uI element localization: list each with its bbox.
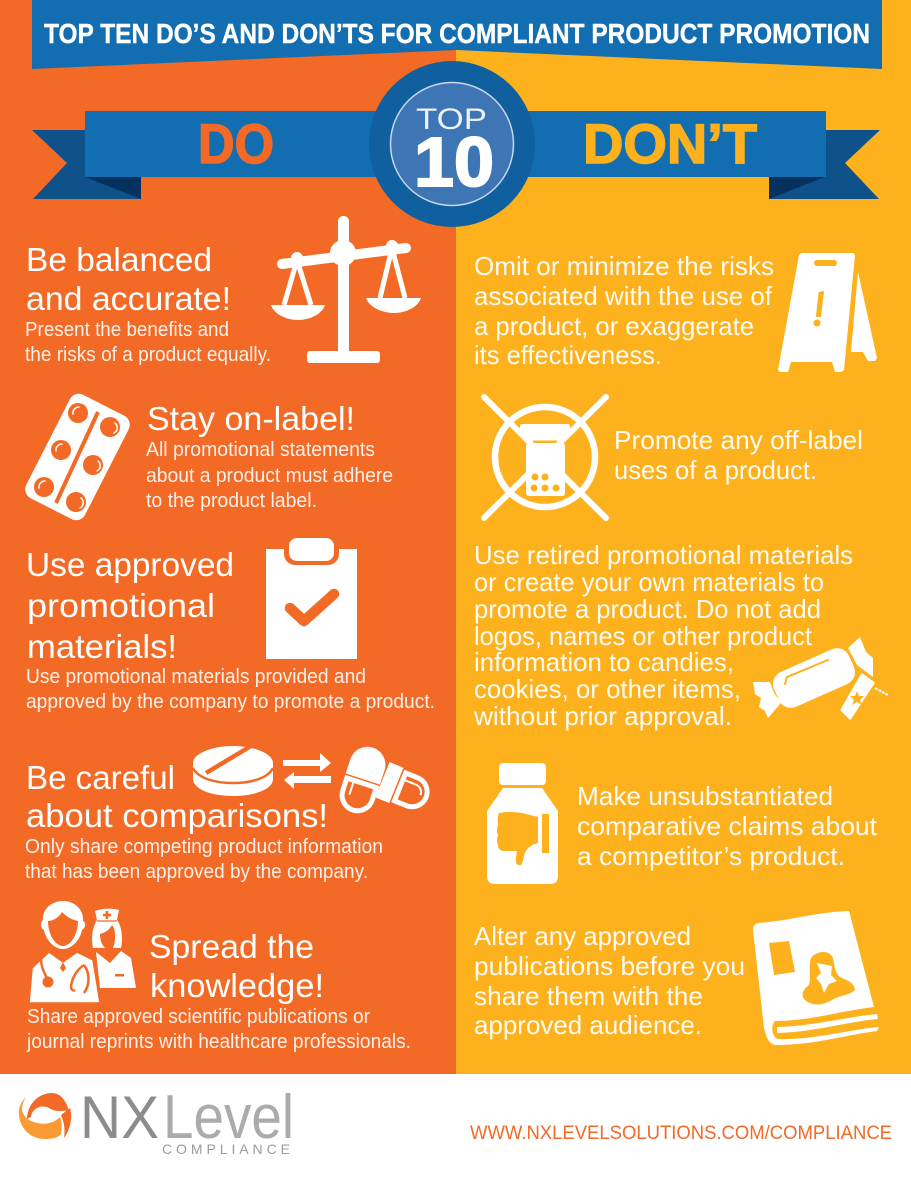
ribbon	[32, 111, 880, 199]
icon: blister pack	[22, 390, 133, 524]
item: omit risks	[474, 251, 877, 372]
heading	[26, 546, 234, 665]
footer background	[0, 1074, 911, 1186]
icon: crossed-out bottle	[484, 397, 606, 518]
heading: Be careful	[26, 759, 175, 796]
description	[25, 836, 383, 883]
description	[26, 666, 435, 713]
description: Use promotional materials provided and	[26, 666, 366, 688]
text: Alter any approved	[474, 921, 691, 951]
description: about a product must adhere	[146, 465, 393, 487]
heading	[26, 241, 231, 317]
heading: materials!	[27, 628, 177, 665]
item: use approved materials	[26, 535, 435, 713]
nurse	[96, 951, 136, 988]
description: to the product label.	[146, 490, 317, 512]
heading: knowledge!	[150, 967, 324, 1004]
text: uses of a product.	[614, 455, 817, 485]
panel: don't background	[456, 0, 911, 1074]
item: unsubstantiated claims	[487, 763, 878, 884]
ribbon band	[85, 111, 826, 177]
heading	[26, 759, 328, 834]
heading: and accurate!	[26, 280, 231, 317]
ribbon tail left	[32, 130, 141, 199]
icon: bottle with thumbs down	[487, 763, 558, 884]
logo wordmark Level: Level	[163, 1083, 294, 1152]
description: the risks of a product equally.	[25, 344, 271, 366]
item: spread the knowledge	[26, 901, 411, 1053]
text: promote a product. Do not add	[474, 594, 821, 624]
text	[473, 540, 853, 731]
item: off-label	[484, 397, 863, 518]
text: its effectiveness.	[474, 340, 662, 370]
description	[25, 319, 271, 366]
icon: swap arrows	[283, 753, 331, 789]
icon: scales	[271, 216, 421, 363]
ribbon tail right	[769, 130, 880, 199]
badge label top: TOP	[416, 103, 487, 136]
logo tagline: COMPLIANCE	[162, 1141, 290, 1157]
description: Only share competing product information	[25, 836, 383, 858]
text: a product, or exaggerate	[474, 311, 754, 341]
ribbon fold left	[85, 177, 141, 199]
logo wordmark NX: NX	[80, 1084, 159, 1151]
heading: about comparisons!	[26, 797, 328, 834]
text	[614, 425, 863, 485]
icon: journal	[753, 911, 879, 1045]
text: publications before you	[474, 951, 745, 981]
description	[146, 439, 393, 512]
text	[474, 921, 745, 1040]
item: retired materials	[473, 540, 888, 731]
text: comparative claims about	[577, 811, 878, 841]
top 10 badge	[369, 61, 535, 227]
text: logos, names or other product	[474, 621, 813, 651]
icon: candy	[753, 637, 888, 718]
text: cookies, or other items,	[474, 674, 741, 704]
heading: Stay on-label!	[147, 400, 355, 437]
text: Make unsubstantiated	[577, 781, 833, 811]
footer url: WWW.NXLEVELSOLUTIONS.COM/COMPLIANCE	[470, 1122, 892, 1144]
description: All promotional statements	[146, 439, 375, 461]
description: journal reprints with healthcare professionals.	[26, 1031, 411, 1053]
doctor	[41, 901, 85, 949]
footer logo	[19, 1083, 294, 1157]
heading	[149, 928, 324, 1004]
description: Present the benefits and	[25, 319, 229, 341]
text: without prior approval.	[473, 701, 732, 731]
title banner	[32, 0, 882, 69]
ribbon fold right	[769, 177, 825, 199]
heading: Be balanced	[26, 241, 212, 278]
item: be balanced	[25, 216, 421, 366]
icon: clipboard	[266, 535, 357, 659]
text: share them with the	[474, 981, 703, 1011]
description	[26, 1006, 411, 1053]
text: a competitor’s product.	[577, 841, 845, 871]
text: or create your own materials to	[474, 567, 824, 597]
item: stay on-label	[22, 390, 393, 524]
logo mark	[19, 1093, 71, 1139]
icon: capsules	[336, 742, 433, 816]
panel: do background	[0, 0, 456, 1074]
badge number 10: 10	[414, 123, 494, 201]
text: Omit or minimize the risks	[474, 251, 774, 281]
heading: promotional	[27, 587, 215, 624]
heading: Spread the	[149, 928, 314, 965]
text: Use retired promotional materials	[474, 540, 853, 570]
text	[474, 251, 774, 370]
description: that has been approved by the company.	[25, 861, 368, 883]
text: information to candies,	[474, 647, 734, 677]
item: be careful about comparisons	[25, 742, 433, 883]
icon: warning sign	[778, 253, 877, 372]
heading: Use approved	[26, 546, 234, 583]
icon: doctor and nurse	[29, 901, 136, 1003]
item: altering publications	[474, 911, 879, 1045]
text: approved audience.	[474, 1010, 702, 1040]
text: Promote any off-label	[614, 425, 863, 455]
text	[577, 781, 878, 871]
text: associated with the use of	[474, 281, 773, 311]
description: approved by the company to promote a product.	[26, 691, 435, 713]
don't heading: DON’T	[583, 112, 757, 175]
icon: tablet	[193, 746, 273, 796]
description: Share approved scientific publications or	[27, 1006, 370, 1028]
do heading: DO	[198, 112, 274, 175]
